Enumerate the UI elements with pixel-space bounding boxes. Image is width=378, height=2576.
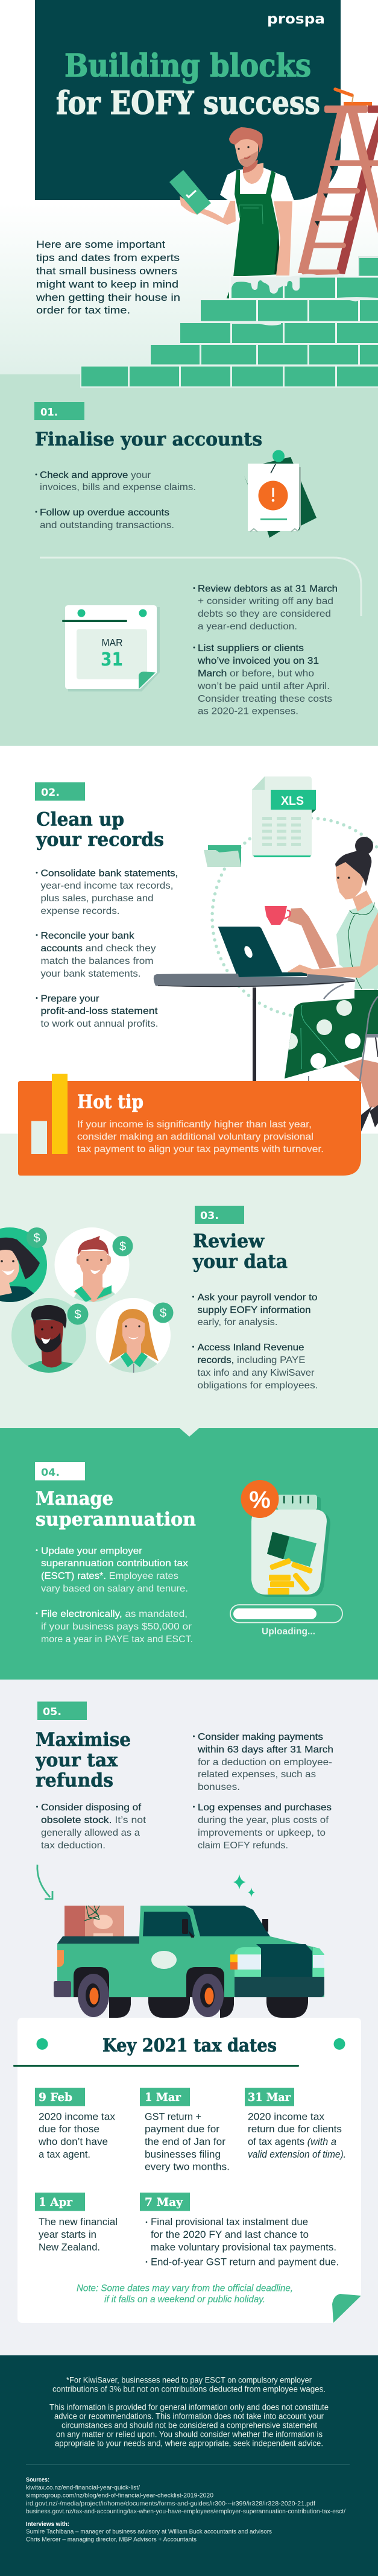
tag 04 — [35, 1462, 85, 1481]
heading — [36, 1488, 196, 1530]
bullets: if your business pays $50,000 or — [41, 1622, 192, 1632]
date: 9 Feb: 2020 income tax — [39, 2111, 116, 2122]
date: 7 May: Final provisional tax instalment due — [151, 2217, 308, 2228]
disclaimer: advice or recommendations. This information does not take into account your — [54, 2411, 324, 2421]
date: 1 Mar: the end of Jan for — [145, 2137, 226, 2147]
panel: 02 clean up your records — [35, 776, 378, 1132]
tag 03 — [195, 1206, 244, 1224]
tag 02: 02. — [41, 787, 60, 799]
callout: hot tip: Hot tip — [77, 1091, 143, 1113]
panel: key 2021 tax dates — [13, 2018, 361, 2323]
callout: hot tip: tax payment to align your tax payments with turnover. — [77, 1144, 324, 1154]
page curl — [332, 2294, 361, 2323]
bullets right — [193, 1732, 333, 1851]
bullets: Update your employer — [41, 1546, 143, 1557]
bullets — [36, 868, 178, 1029]
bullets right — [193, 584, 338, 716]
bullets — [35, 470, 196, 531]
intro text: might want to keep in mind — [36, 279, 178, 290]
icon: XLS document: XLS — [281, 795, 304, 808]
date: 9 Feb: 9 Feb — [39, 2091, 72, 2104]
icon: builder man holding document — [169, 127, 294, 300]
note: if it falls on a weekend or public holiday. — [104, 2294, 265, 2305]
date: 1 Mar: payment due for — [145, 2124, 220, 2135]
date: 9 Feb: who don’t have — [38, 2137, 108, 2147]
bullets — [192, 1293, 318, 1391]
icon: employee portraits — [0, 1227, 174, 1381]
date: 7 May — [140, 2193, 339, 2268]
date: 7 May: for the 2020 FY and last chance to — [151, 2229, 309, 2240]
disclaimer: contributions of 3% but not on contributions deducted from employee wages. — [52, 2385, 326, 2393]
heading: Key 2021 tax dates — [102, 2035, 277, 2056]
icon: sparkles — [233, 1874, 255, 1897]
bullets right: for a deduction on employee- — [198, 1757, 332, 1768]
disclaimer: This information is provided for general information only and does not constitute — [49, 2403, 329, 2411]
heading — [36, 809, 164, 851]
bullets right: List suppliers or clients — [198, 643, 304, 653]
bullets right: won’t be paid until after April. — [197, 681, 330, 691]
icon: jar of savings: % — [249, 1487, 271, 1513]
date: 31 Mar — [245, 2088, 346, 2160]
bullets right: March or before, but who — [198, 669, 314, 679]
date: 9 Feb: due for those — [39, 2124, 99, 2135]
date: 1 Mar: businesses filing — [145, 2149, 221, 2160]
date: 1 Apr — [35, 2193, 118, 2253]
bullets: profit-and-loss statement — [41, 1006, 158, 1016]
bullets left: obsolete stock. It’s not — [41, 1815, 146, 1825]
portrait 1 — [0, 1227, 47, 1305]
date: 1 Mar: GST return + — [145, 2111, 201, 2122]
portrait 2 — [54, 1227, 133, 1305]
panel: 03 review your data — [0, 1206, 318, 1391]
bullets left — [36, 1803, 146, 1851]
progress bar — [230, 1605, 342, 1637]
heading: Finalise your accounts — [35, 429, 262, 450]
bullets: supply EOFY information — [198, 1305, 311, 1315]
date: 9 Feb — [35, 2088, 116, 2160]
tag 04: 04. — [41, 1467, 60, 1479]
portrait 2: $ — [119, 1240, 126, 1253]
icon: calendar 31 March: 31 — [101, 649, 123, 670]
heading: Review — [193, 1230, 265, 1252]
bullets: obligations for employees. — [198, 1381, 318, 1391]
date: 1 Mar: every two months. — [145, 2162, 230, 2173]
heading: Clean up — [36, 809, 124, 831]
progress bar: Uploading... — [262, 1627, 315, 1637]
header panel — [35, 0, 341, 200]
bullets: (ESCT) rates*. Employee rates — [41, 1571, 178, 1581]
date: 1 Apr: The new financial — [39, 2217, 118, 2228]
lights and front — [235, 1947, 261, 1977]
bullets: more a year in PAYE tax and ESCT. — [41, 1634, 193, 1645]
bullets right: during the year, plus costs of — [198, 1815, 329, 1825]
rear wheels — [109, 1997, 308, 2018]
sources: Interviews with: — [26, 2521, 69, 2528]
callout: hot tip: If your income is significantly higher than last year, — [77, 1120, 312, 1130]
cargo box — [65, 1906, 124, 1936]
sources: Sumire Tachibana – manager of business advisory at William Buck accountants and advisors — [26, 2528, 272, 2536]
heading: refunds — [36, 1770, 113, 1792]
icon: overdue receipt — [244, 450, 317, 538]
sources: kiwitax.co.nz/end-financial-year-quick-list/ — [26, 2484, 140, 2491]
bullets: and outstanding transactions. — [40, 520, 174, 531]
panel: 01 finalise your accounts — [34, 402, 361, 716]
icon: jar of savings — [241, 1480, 330, 1597]
bullets — [36, 1546, 193, 1645]
callout: hot tip — [18, 1074, 361, 1176]
icon: calendar 31 March — [62, 605, 160, 691]
bullets left: generally allowed as a — [41, 1828, 140, 1838]
bullets right: a year-end deduction. — [198, 622, 297, 632]
bullets right: claim EOFY refunds. — [198, 1841, 288, 1851]
bullets right: bonuses. — [198, 1782, 240, 1792]
date: 31 Mar: 31 Mar — [248, 2091, 291, 2104]
bullets left: Consider disposing of — [41, 1803, 142, 1813]
icon: calendar 31 March: MAR — [101, 637, 123, 649]
icon: XLS document — [252, 776, 316, 857]
bullets: File electronically, as mandated, — [41, 1609, 187, 1619]
tag 03: 03. — [200, 1210, 219, 1222]
bullets: Check and approve your — [40, 470, 151, 480]
bullets: expense records. — [41, 906, 119, 916]
note — [77, 2284, 293, 2305]
icon: rising bars — [31, 1074, 68, 1154]
date: 1 Apr: New Zealand. — [39, 2242, 100, 2253]
bullets right: within 63 days after 31 March — [197, 1745, 333, 1755]
bullets right: who’ve invoiced you on 31 — [197, 656, 319, 666]
heading — [192, 1230, 288, 1273]
bullets: tax info and any KiwiSaver — [198, 1368, 315, 1378]
illustration: woman at laptop — [154, 837, 378, 1132]
heading: your records — [36, 829, 164, 851]
heading: superannuation — [36, 1508, 196, 1530]
intro text: tips and dates from experts — [36, 252, 180, 263]
disclaimer — [49, 2375, 329, 2448]
bullets left: tax deduction. — [41, 1841, 106, 1851]
bullets right: Log expenses and purchases — [198, 1803, 332, 1813]
portrait 4: $ — [160, 1307, 166, 1320]
disclaimer: circumstances and should not be considered a comprehensive statement — [61, 2421, 317, 2430]
title — [56, 48, 320, 122]
disclaimer: *For KiwiSaver, businesses need to pay ESCT on compulsory employer — [66, 2375, 312, 2385]
bullets: plus sales, purchase and — [41, 893, 153, 904]
icon: folder — [204, 845, 241, 867]
sources: business.govt.nz/tax-and-accounting/tax-when-you-have-employees/employer-superannuation-contribution-tax-esct/ — [26, 2508, 345, 2515]
bullets right: related expenses, such as — [198, 1769, 316, 1780]
bullets: superannuation contribution tax — [41, 1558, 188, 1569]
bullets right: debts so they are considered — [198, 609, 331, 619]
title: for EOFY success — [56, 85, 320, 122]
sources — [26, 2477, 345, 2543]
intro text: when getting their house in — [36, 292, 180, 303]
date: 1 Apr: 1 Apr — [39, 2196, 73, 2209]
date: 31 Mar: return due for clients — [248, 2124, 342, 2135]
date: 7 May: End-of-year GST return and payment due. — [151, 2257, 339, 2268]
bullets: invoices, bills and expense claims. — [40, 482, 196, 493]
bullets: Consolidate bank statements, — [41, 868, 178, 879]
tag 01: 01. — [40, 406, 58, 418]
bullets: Reconcile your bank — [41, 931, 135, 941]
bullets: your bank statements. — [41, 969, 141, 979]
tag 05 — [37, 1701, 87, 1720]
date: 31 Mar: 2020 income tax — [248, 2111, 325, 2122]
date: 1 Mar — [140, 2088, 230, 2173]
panel: 04 manage superannuation — [35, 1462, 342, 1645]
intro text: Here are some important — [36, 239, 165, 250]
callout: hot tip: consider making an additional voluntary provisional — [77, 1132, 313, 1142]
date: 7 May: make voluntary provisional tax payments. — [151, 2242, 336, 2253]
bullets: records, including PAYE — [198, 1355, 305, 1365]
dotted orbit — [212, 818, 378, 1017]
icon: ladder with paint roller — [298, 89, 378, 275]
disclaimer: on any matter or relied upon. You should consider whether the information is — [56, 2430, 323, 2439]
date: 1 Mar: 1 Mar — [145, 2091, 181, 2104]
date: 1 Apr: year starts in — [39, 2229, 96, 2240]
bullets right: + consider writing off any bad — [198, 596, 333, 606]
bullets: accounts and check they — [41, 943, 156, 954]
sources: Chris Mercer – managing director, MBP Advisors + Accountants — [26, 2536, 197, 2543]
heading: Manage — [36, 1488, 113, 1510]
bullets: early, for analysis. — [198, 1317, 277, 1327]
portrait 3: $ — [74, 1308, 81, 1321]
front wheels — [78, 1974, 224, 2017]
bullets: Ask your payroll vendor to — [198, 1293, 318, 1303]
illustration: pickup truck — [54, 1906, 324, 2018]
heading: your data — [192, 1251, 288, 1273]
sources: ird.govt.nz/-/media/project/ir/home/documents/forms-and-guides/ir300---ir399/ir328/ir328-2020-21.pdf — [26, 2500, 315, 2507]
sources: simprogroup.com/nz/blog/end-of-financial-year-checklist-2019-2020 — [26, 2492, 213, 2499]
heading — [35, 1729, 131, 1792]
date: 31 Mar: of tax agents (with a — [248, 2137, 336, 2147]
heading: Maximise — [36, 1729, 131, 1751]
bullets: Access Inland Revenue — [198, 1343, 304, 1353]
arrow notch: section 03 to 04 — [180, 1428, 199, 1437]
bullets right: as 2020-21 expenses. — [198, 707, 298, 716]
intro text — [36, 239, 180, 316]
date: 7 May: 7 May — [145, 2196, 183, 2209]
logo: prospa: prospa — [267, 11, 325, 27]
tag 01 — [34, 402, 84, 420]
intro text: that small business owners — [36, 265, 177, 277]
bullets: match the balances from — [41, 956, 153, 966]
divider curve — [40, 558, 361, 616]
bullets right: Review debtors as at 31 March — [198, 584, 338, 594]
bullets: year-end income tax records, — [41, 881, 174, 891]
wheel arches — [74, 1967, 109, 1997]
bullets: to work out annual profits. — [41, 1019, 158, 1029]
portrait 1: $ — [33, 1232, 40, 1245]
arrow — [37, 1865, 52, 1899]
footer — [26, 2375, 350, 2543]
portrait 3 — [11, 1298, 88, 1381]
bullets: vary based on salary and tenure. — [41, 1584, 188, 1594]
tag 05: 05. — [43, 1706, 61, 1718]
heading: your tax — [35, 1749, 118, 1771]
note: Note: Some dates may vary from the official deadline, — [77, 2284, 293, 2293]
date: 31 Mar: valid extension of time). — [248, 2149, 346, 2160]
date: 9 Feb: a tax agent. — [39, 2149, 90, 2160]
bullets: Prepare your — [41, 994, 99, 1004]
bullets right: Consider making payments — [198, 1732, 323, 1742]
title: Building blocks — [65, 48, 311, 84]
bullets right: improvements or upkeep, to — [198, 1828, 326, 1838]
intro text: order for tax time. — [36, 304, 130, 316]
bullets right: Consider treating these costs — [198, 694, 332, 704]
paint drips — [231, 277, 300, 294]
portrait 4 — [96, 1298, 174, 1381]
tag 02 — [35, 783, 85, 801]
illustration: brick wall — [80, 256, 378, 388]
bullets: Follow up overdue accounts — [40, 508, 169, 518]
disclaimer: appropriate to your needs and, where appropriate, seek independent advice. — [55, 2439, 323, 2448]
sources: Sources: — [26, 2477, 49, 2484]
panel: 05 maximise your tax refunds — [35, 1701, 333, 2018]
